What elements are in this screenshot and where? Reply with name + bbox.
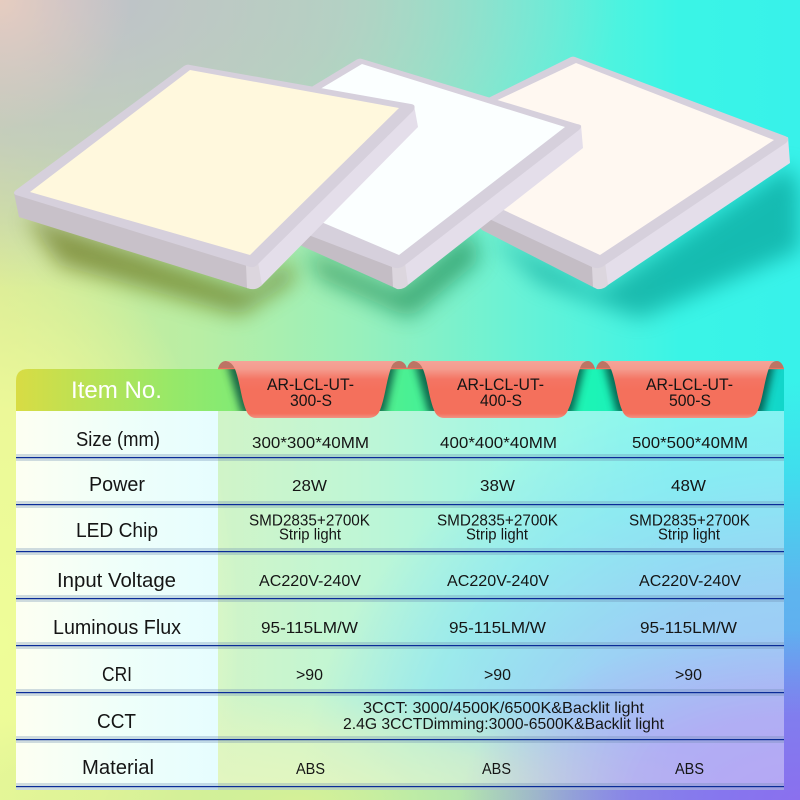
ribbon: model 400 (407, 361, 595, 418)
row: LED chip: SMD2835+2700K (629, 512, 750, 530)
specification table (16, 361, 784, 790)
row: CRI (102, 664, 702, 686)
row: LED chip: SMD2835+2700K (249, 512, 370, 530)
row: size (76, 429, 748, 452)
ribbon: model 500: AR-LCL-UT- (646, 376, 733, 394)
ribbon shadows (222, 369, 778, 411)
row: input voltage: Input Voltage (57, 570, 176, 592)
row: size: 400*400*40MM (440, 435, 557, 452)
row: LED chip: Strip light (658, 526, 721, 544)
row: power: 38W (480, 478, 516, 495)
row: power: 28W (292, 478, 328, 495)
product: middle 400 mm panel (280, 59, 583, 289)
ribbon: model 500: 500-S (669, 392, 711, 410)
heading: item number: Item No. (71, 377, 162, 404)
ribbon: model 300: AR-LCL-UT- (267, 376, 354, 394)
row: LED chip: Strip light (279, 526, 342, 544)
row: luminous flux (53, 617, 738, 639)
panel side wall (247, 105, 418, 289)
row: CCT: 3CCT: 3000/4500K/6500K&Backlit light (363, 700, 645, 717)
row: material: ABS (296, 761, 325, 778)
warm light surface (30, 70, 399, 255)
ribbon: model 400: AR-LCL-UT- (457, 376, 544, 394)
row: LED chip: SMD2835+2700K (437, 512, 558, 530)
row: luminous flux: 95-115LM/W (261, 620, 359, 637)
product: front 300 mm panel (14, 65, 418, 289)
ribbon: model 500 (596, 361, 784, 418)
row: power: Power (89, 474, 145, 496)
row: input voltage: AC220V-240V (447, 573, 549, 590)
row: size: 500*500*40MM (632, 435, 748, 452)
product: right 500 mm panel (470, 57, 790, 289)
row: CRI: CRI (102, 664, 132, 686)
row: input voltage (57, 570, 741, 592)
row: CRI: >90 (675, 667, 702, 684)
panel bezel (14, 65, 415, 267)
row: LED chip: Strip light (466, 526, 529, 544)
row: luminous flux: 95-115LM/W (640, 620, 738, 637)
ribbon: model 300: 300-S (290, 392, 332, 410)
row: luminous flux: 95-115LM/W (449, 620, 547, 637)
row: CCT: CCT (97, 711, 136, 733)
row: CRI: >90 (484, 667, 511, 684)
ribbon: model 400: 400-S (480, 392, 522, 410)
row: size: Size (mm) (76, 429, 160, 451)
row: CRI: >90 (296, 667, 323, 684)
row: CCT: 2.4G 3CCTDimming:3000-6500K&Backlit light (343, 716, 665, 733)
ribbon: model 300 (218, 361, 407, 418)
row: luminous flux: Luminous Flux (53, 617, 181, 639)
row: input voltage: AC220V-240V (639, 573, 741, 590)
row: input voltage: AC220V-240V (259, 573, 361, 590)
header bar (16, 369, 784, 411)
table body (16, 411, 784, 790)
row: material: Material (82, 757, 154, 779)
panel corner (246, 262, 262, 289)
row: material (82, 757, 704, 779)
row: CCT (97, 700, 665, 733)
row: power: 48W (671, 478, 707, 495)
row: material: ABS (482, 761, 511, 778)
row: LED chip (76, 512, 750, 544)
row: material: ABS (675, 761, 704, 778)
row: power (89, 474, 707, 496)
row: LED chip: LED Chip (76, 520, 158, 542)
panel shadows (25, 165, 800, 318)
panel front wall (14, 193, 254, 289)
row: size: 300*300*40MM (252, 435, 369, 452)
